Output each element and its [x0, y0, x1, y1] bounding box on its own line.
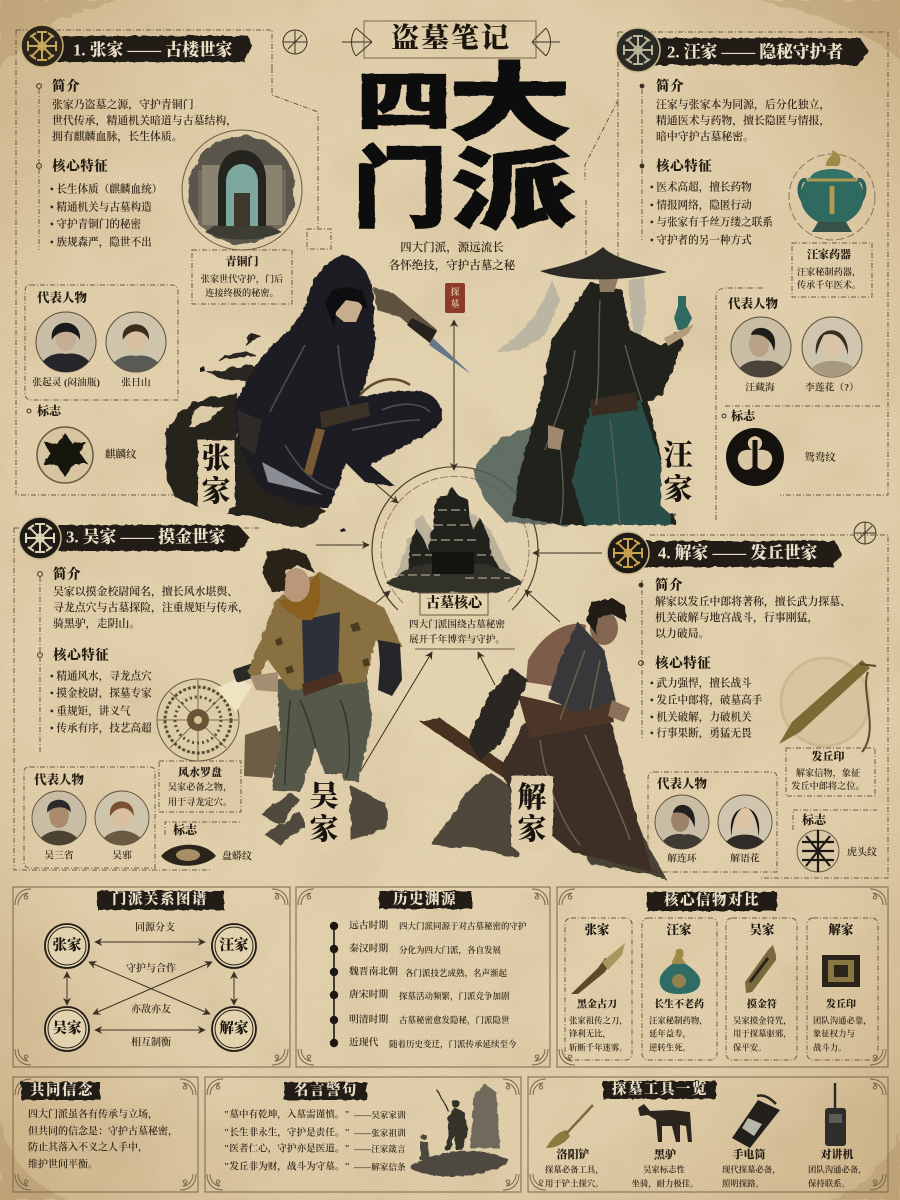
quotes: ——解家信条: [353, 1161, 406, 1172]
core traits: • 精通机关与古墓构造: [50, 200, 152, 214]
node: 汪家: [212, 924, 256, 968]
tool: 洛阳铲: 洛阳铲: [556, 1147, 590, 1161]
core traits: • 医术高超，擅长药物: [650, 180, 752, 194]
caption: 发丘印: [786, 748, 875, 796]
core traits: • 长生体质（麒麟血统）: [50, 182, 162, 196]
emblem: 虎头纹: 虎头纹: [847, 846, 877, 858]
core traits: 核心特征: [52, 158, 108, 174]
relic card: 解家: 象征权力与: [813, 1028, 855, 1038]
tool: 手电筒: 现代探墓必备，: [722, 1164, 781, 1176]
core traits: • 机关破解，力破机关: [650, 710, 752, 724]
intro: 精通医术与药物，擅长隐匿与情报，: [656, 113, 830, 127]
belief text: 四大门派虽各有传承与立场，: [28, 1108, 158, 1120]
heading: [379, 890, 472, 909]
node: 汪家: 汪家: [220, 936, 249, 954]
core traits: • 族规森严，隐世不出: [50, 236, 152, 248]
intro: [38, 566, 249, 752]
timeline entries: 明清时期: [349, 1012, 388, 1026]
compass sketch: lower right: [854, 522, 876, 544]
main title: 四大门派: 派: [451, 141, 575, 239]
emblem: 麒麟纹: 麒麟纹: [105, 448, 137, 460]
tag: 解家: 解: [517, 781, 547, 814]
header: 吴家: [19, 517, 250, 559]
core traits: 核心特征: [53, 646, 109, 664]
node: 解家: 解家: [220, 1019, 249, 1037]
relic card: 汪家: 逆转生死。: [649, 1042, 691, 1052]
caption: 风水罗盘: 用于寻龙定穴。: [168, 796, 232, 807]
tool: 对讲机: 保持联系。: [808, 1178, 850, 1188]
timeline entries: 唐宋时期: [349, 988, 388, 1000]
label: 古墓核心: [420, 593, 488, 615]
subtitle: 各怀绝技，守护古墓之秘: [389, 258, 517, 272]
tool: 手电筒: 手电筒: [732, 1147, 766, 1161]
emblem: 鸳鸯纹: [722, 406, 880, 486]
heading: 共同信念: [30, 1081, 94, 1099]
belief text: 但共同的信念是：守护古墓秘密，: [28, 1124, 178, 1138]
relic card: 吴家: 保平安。: [733, 1042, 766, 1052]
tool: 洛阳铲: 探墓必备工具，: [545, 1164, 604, 1176]
representative figures: 代表人物: [37, 290, 88, 305]
red seal: 探: [450, 286, 460, 297]
header: 解家: 4. 解家 —— 发丘世家: [658, 542, 818, 562]
belief text: [28, 1108, 178, 1170]
relic card: 张家: 张家: [584, 922, 610, 937]
intro: 拥有麒麟血脉，长生体质。: [52, 129, 183, 143]
representative figures: [24, 767, 155, 868]
caption: 汪家药器: 汪家药器: [807, 247, 851, 261]
caption: 青铜门: [192, 250, 292, 304]
quotes: ——汪家箴言: [353, 1143, 406, 1154]
heading: [21, 1081, 100, 1100]
character: 汪家 medic: [473, 247, 695, 525]
heading: 探墓工具一览: [612, 1080, 708, 1098]
avatar: 解连环: [655, 795, 709, 851]
intro: 世代传承，精通机关暗道与古墓结构，: [52, 113, 237, 127]
core traits: [37, 158, 162, 248]
arrow: west to core: [316, 544, 369, 546]
relic card: 汪家: [642, 918, 717, 1060]
relic card: 吴家: 吴家摸金符咒，: [733, 1016, 792, 1026]
relic card: 张家: [565, 918, 632, 1060]
tool: 黑驴: 黑驴: [654, 1147, 676, 1161]
timeline entries: 近现代: [349, 1036, 379, 1048]
quotes: "医者仁心，守护亦是医道。": [224, 1144, 350, 1154]
intro: 简介: [655, 576, 683, 592]
node: 张家: [45, 924, 89, 968]
timeline entries: 四大门派同源于对古墓秘密的守护: [399, 921, 527, 931]
caption: 风水罗盘: [159, 761, 241, 812]
caption: 发丘印: 发丘中郎将之位。: [791, 780, 865, 791]
description: 展开千年博弈与守护。: [409, 634, 505, 646]
tag: 吴家: [305, 774, 343, 851]
timeline entries: 随着历史变迁，门派传承延续至今: [389, 1039, 517, 1050]
representative figures: 张日山: [121, 376, 151, 388]
tomb core circle: [372, 467, 538, 649]
title plate: 盗墓笔记: 盗墓笔记: [391, 22, 511, 54]
core traits: • 传承有序，技艺高超: [50, 722, 152, 734]
intro: 张家乃盗墓之源，守护青铜门: [52, 97, 194, 111]
representative figures: 解连环: [667, 852, 698, 864]
heading: 核心信物对比: [664, 891, 760, 909]
panel: 吴家: [14, 517, 260, 870]
timeline entries: 古墓秘密愈发隐秘，门派隐世: [399, 1015, 510, 1026]
relationship labels: 守护与合作: [126, 962, 176, 974]
timeline entries: 魏晋南北朝: [349, 964, 398, 978]
belief text: 维护世间平衡。: [28, 1158, 98, 1170]
tool: 手电筒: 照明探路。: [722, 1178, 764, 1188]
emblem: 虎头纹: 标志: [802, 812, 828, 827]
relationship labels: [126, 920, 176, 1048]
intro: 以力破局。: [655, 626, 709, 640]
avatar: 汪藏海: [731, 317, 791, 379]
tool: 对讲机: 团队沟通必备，: [808, 1164, 867, 1176]
relic card: 张家: 黑金古刀: [577, 998, 617, 1010]
panel: core relics comparison: [557, 887, 888, 1067]
intro: 骑黑驴，走阴山。: [53, 616, 140, 630]
icon: 发丘印 weapon: [779, 658, 876, 752]
character: 张家 warrior: [165, 255, 471, 532]
header: 汪家: [616, 28, 868, 72]
emblem: 麒麟纹: 标志: [37, 403, 63, 418]
arrow: xie to core: [478, 652, 495, 685]
quotes: ——吴家家训: [353, 1109, 406, 1120]
emblem: 虎头纹: [793, 810, 877, 872]
representative figures: [25, 285, 178, 400]
arrow: east to core: [533, 552, 602, 554]
representative figures: [716, 288, 862, 520]
core traits: • 精通风水，寻龙点穴: [50, 670, 152, 682]
tag: 吴家: 家: [309, 812, 339, 846]
tag: 张家: 张: [201, 442, 231, 475]
quotes: "发丘非为财，战斗为守墓。": [224, 1162, 350, 1172]
tool: 黑驴: [632, 1104, 698, 1190]
intro: 简介: [53, 566, 81, 582]
representative figures: 代表人物: [728, 296, 779, 311]
relic card: 解家: 团队沟通必靠，: [813, 1016, 872, 1026]
relic card: 解家: 发丘印: [826, 998, 856, 1010]
icon: bronze door: [182, 130, 302, 250]
caption: 青铜门: 青铜门: [226, 254, 258, 268]
intro: [639, 576, 851, 640]
representative figures: 李莲花（?）: [805, 380, 859, 394]
intro: 机关破解与地宫战斗，行事刚猛，: [655, 610, 818, 624]
arrow: north to core: [453, 320, 455, 470]
node: 吴家: 吴家: [52, 1019, 82, 1037]
heading: 名言警句: [294, 1081, 358, 1099]
tag: 汪家: 家: [663, 472, 693, 506]
representative figures: 吴三省: [44, 848, 74, 862]
relationship arrows: [67, 942, 234, 1030]
relic card: 解家: [807, 918, 878, 1060]
intro: [37, 78, 237, 250]
representative figures: 代表人物: [657, 776, 708, 791]
representative figures: 解语花: [730, 852, 760, 864]
core traits: • 守护青铜门的秘密: [50, 218, 142, 230]
relic card: 汪家: 汪家秘制药物，: [649, 1016, 708, 1026]
panel: 汪家: [585, 28, 888, 520]
avatar: 解语花: [718, 795, 772, 851]
relic card: 吴家: [726, 918, 797, 1060]
timeline entries: 各门派技艺成熟，名声渐起: [405, 968, 508, 979]
intro: 解家以发丘中郎将著称，擅长武力探墓、: [655, 594, 851, 608]
core traits: [639, 654, 763, 740]
relationship labels: 同源分支: [135, 920, 175, 934]
icon: mountain temple: [386, 487, 522, 594]
avatar: 吴邪: [95, 791, 149, 847]
avatar: 李莲花: [802, 317, 862, 379]
core traits: • 发丘中郎将，破墓高手: [650, 694, 763, 706]
timeline entries: 秦汉时期: [349, 942, 388, 954]
panel: relationship chart: [13, 887, 290, 1067]
relic card: 解家: 解家: [828, 922, 854, 937]
panel: tools overview: [528, 1077, 888, 1192]
heading: [284, 1081, 367, 1100]
core traits: 核心特征: [655, 654, 711, 672]
core traits: • 武力强悍，擅长战斗: [650, 676, 752, 690]
node: 张家: 张家: [52, 936, 82, 954]
heading: [97, 890, 224, 910]
intro: 简介: [656, 78, 684, 94]
panel: shared belief: [13, 1077, 198, 1192]
main title: 四大门派: 门: [353, 141, 447, 239]
representative figures: 吴邪: [112, 850, 132, 862]
arrow: lower right to core: [525, 590, 560, 622]
tool: 黑驴: 吴家标志性: [643, 1164, 686, 1174]
relic card: 吴家: 用于探墓驱邪，: [733, 1028, 792, 1040]
header: 解家: [607, 532, 842, 574]
core traits: • 守护者的另一种方式: [650, 234, 752, 246]
relic card: 解家: 战斗力。: [813, 1042, 846, 1052]
tag: 张家: 家: [201, 474, 231, 508]
relic card: 张家: 斩断千年迷雾。: [569, 1042, 628, 1052]
arrow: zhang to core: [365, 475, 398, 503]
avatar: 吴三省: [32, 791, 86, 847]
heading: [647, 891, 777, 911]
caption: 汪家药器: 传承千年医术。: [797, 279, 861, 290]
tool: 对讲机: 对讲机: [820, 1147, 854, 1161]
caption: 青铜门: 连接终极的秘密。: [205, 287, 279, 298]
relic card: 张家: 锋利无比，: [569, 1028, 611, 1040]
tool: 黑驴: 坐骑，耐力极佳。: [632, 1178, 698, 1190]
intro: 吴家以摸金校尉闻名，擅长风水堪舆、: [53, 584, 238, 598]
caption: 风水罗盘: 吴家必备之物，: [168, 781, 232, 793]
arrow: lower left to core: [360, 652, 432, 772]
core traits: • 摸金校尉，探墓专家: [50, 686, 152, 700]
character: 解家 fighter: [420, 598, 665, 878]
node: 解家: [212, 1007, 256, 1051]
core traits: • 情报网络，隐匿行动: [650, 198, 752, 212]
caption: 汪家药器: 汪家秘制药器，: [797, 266, 861, 278]
panel: history timeline: [296, 887, 550, 1067]
emblem: 盘蟒纹: 盘蟒纹: [222, 850, 252, 862]
relic card: 汪家: 延年益寿，: [649, 1028, 691, 1040]
description: 四大门派围绕古墓秘密: [409, 618, 505, 630]
description: [409, 618, 515, 649]
caption: 风水罗盘: 风水罗盘: [178, 765, 222, 779]
quotes: ——张家祖训: [353, 1127, 406, 1138]
intro: [640, 78, 830, 240]
timeline entries: [349, 918, 527, 1050]
quotes: [224, 1108, 406, 1172]
emblem: 麒麟纹: [27, 403, 137, 483]
subtitle: [389, 240, 517, 272]
tag: 汪家: [661, 434, 695, 514]
avatar: 张日山: [106, 312, 166, 374]
compass sketch: top left: [283, 30, 307, 54]
icon: medicine vessel: [789, 150, 875, 240]
intro: 寻龙点穴与古墓探险，注重规矩与传承，: [53, 600, 249, 614]
caption: 发丘印: 解家信物，象征: [796, 767, 861, 779]
relic card: 张家: 张家祖传之刀，: [569, 1016, 628, 1026]
timeline entries: 分化为四大门派，各自发展: [399, 945, 502, 956]
tag: 解家: 家: [517, 812, 547, 846]
relic card: 汪家: 长生不老药: [654, 998, 704, 1010]
core traits: [640, 158, 773, 246]
intro: 简介: [52, 78, 80, 94]
relic card: 汪家: 汪家: [666, 922, 692, 937]
main title: 四大门派: 四: [356, 67, 452, 139]
emblem: 盘蟒纹: 标志: [173, 822, 199, 837]
tool: 洛阳铲: [545, 1105, 604, 1188]
header: 汪家: 2. 汪家 —— 隐秘守护者: [667, 42, 843, 62]
intro: 暗中守护古墓秘密。: [656, 129, 754, 143]
timeline entries: 探墓活动频繁，门派竞争加剧: [399, 991, 510, 1002]
representative figures: [648, 772, 777, 872]
tag: 吴家: 吴: [309, 780, 339, 813]
representative figures: 代表人物: [34, 772, 85, 787]
illustration: explorers and tower: [410, 1084, 509, 1176]
panel: famous quotes: [205, 1077, 521, 1192]
icon: fengshui compass: [157, 679, 239, 761]
tool: 手电筒: [722, 1095, 781, 1188]
timeline axis: [330, 922, 338, 1047]
red seal: 墓: [450, 298, 460, 309]
caption: 汪家药器: [792, 243, 872, 297]
core traits: [38, 646, 152, 734]
core traits: • 与张家有千丝万缕之联系: [650, 216, 773, 228]
quotes: "长生非永生，守护是责任。": [224, 1128, 350, 1138]
arrow: wu shoulder to core: [370, 591, 390, 608]
main title: 四大门派: [353, 57, 575, 239]
heading: 历史渊源: [393, 890, 457, 908]
belief text: 防止其落入不义之人手中，: [28, 1140, 148, 1154]
caption: 发丘印: 发丘印: [812, 749, 844, 763]
tag: 汪家: 汪: [663, 439, 693, 472]
avatar: 张起灵: [36, 312, 96, 374]
emblem: 鸳鸯纹: 鸳鸯纹: [804, 450, 836, 464]
panel: 张家: [16, 25, 318, 495]
header: 张家: [21, 25, 252, 67]
tag: 解家: [511, 776, 553, 853]
tool: 对讲机: [808, 1083, 867, 1188]
relationship labels: 相互制衡: [131, 1036, 171, 1048]
quotes: "墓中有乾坤，入墓需谨慎。": [224, 1110, 350, 1120]
label: 古墓核心: 古墓核心: [426, 594, 485, 612]
core traits: 核心特征: [656, 158, 712, 174]
representative figures: 汪藏海: [745, 380, 775, 394]
node: 吴家: [45, 1007, 89, 1051]
relic card: 吴家: 摸金符: [747, 998, 777, 1010]
intro: 汪家与张家本为同源，后分化独立，: [656, 97, 830, 111]
tool: 洛阳铲: 用于铲土探穴。: [545, 1178, 604, 1188]
red seal: [445, 283, 465, 313]
header: 吴家: 3. 吴家 —— 摸金世家: [66, 526, 226, 546]
emblem: 盘蟒纹: [161, 822, 252, 866]
tag: 张家: [198, 440, 235, 513]
relationship labels: 亦敌亦友: [131, 1002, 171, 1016]
character: 吴家 explorer: [216, 548, 402, 845]
core traits: • 重规矩，讲义气: [50, 704, 131, 718]
note box sketch: [307, 229, 331, 249]
panel: 解家: [607, 532, 888, 878]
caption: 青铜门: 张家世代守护，门后: [201, 273, 283, 285]
timeline entries: 远古时期: [349, 918, 388, 932]
emblem: 鸳鸯纹: 标志: [731, 408, 757, 423]
core traits: • 行事果断，勇猛无畏: [650, 726, 752, 740]
relic card: 吴家: 吴家: [749, 922, 775, 937]
header: 张家: 1. 张家 —— 古楼世家: [73, 40, 233, 60]
main title: 四大门派: 大: [449, 57, 571, 151]
subtitle: 四大门派，源远流长: [400, 240, 504, 254]
title plate: 盗墓笔记: [342, 21, 560, 58]
representative figures: 张起灵 (闷油瓶): [32, 376, 100, 388]
heading: 门派关系图谱: [112, 890, 208, 908]
